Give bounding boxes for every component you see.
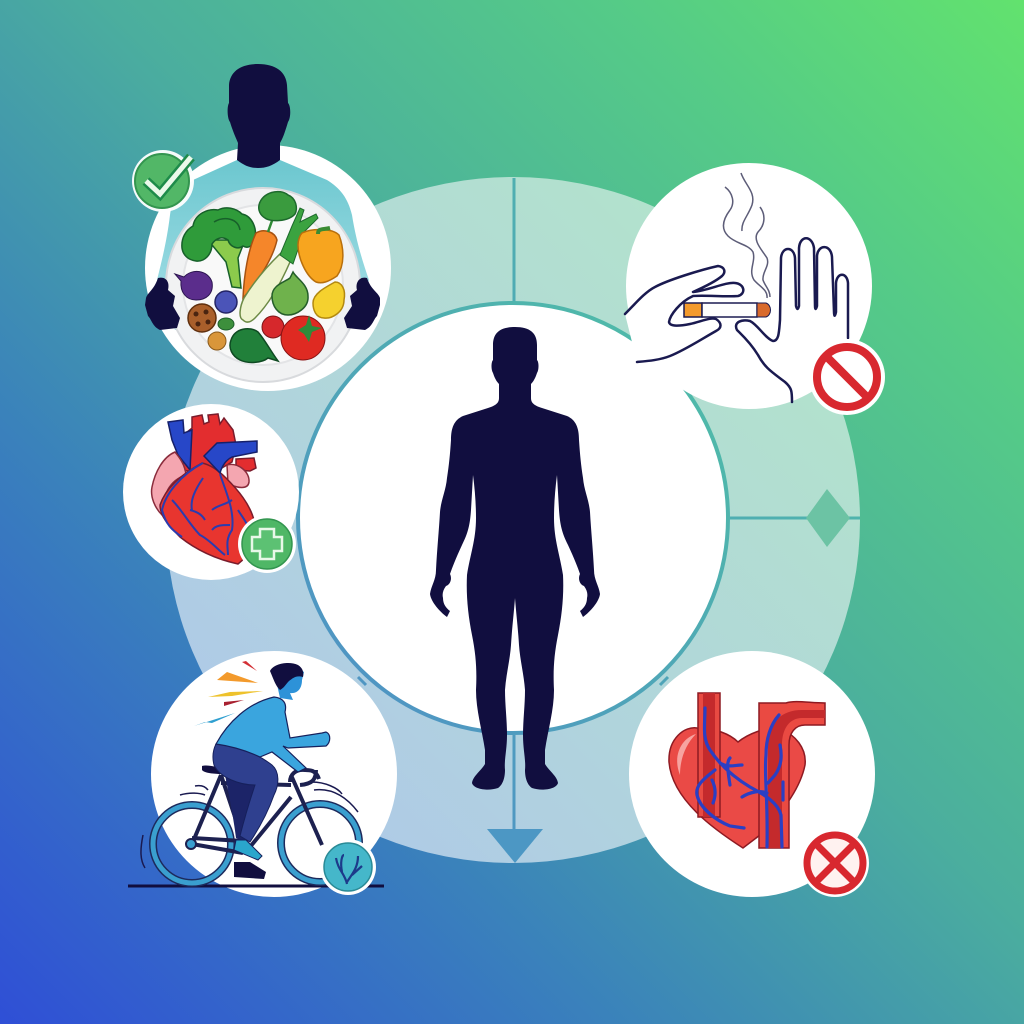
heart xyxy=(669,728,805,848)
plum xyxy=(215,291,237,313)
coronary vessels xyxy=(162,463,248,555)
hands xyxy=(145,278,180,330)
broccoli xyxy=(182,208,255,288)
spinach xyxy=(230,329,278,362)
panel: healthy heart xyxy=(123,404,299,580)
head xyxy=(270,663,304,700)
icon: cross badge xyxy=(801,829,869,897)
plate xyxy=(166,188,360,382)
wheels xyxy=(153,804,359,883)
cigarette xyxy=(684,303,770,317)
back shoe xyxy=(234,862,266,879)
person head silhouette xyxy=(228,64,290,168)
cookie xyxy=(188,304,216,332)
panel: healthy food xyxy=(145,64,391,391)
small leaf xyxy=(218,318,234,330)
ventricle xyxy=(160,463,255,564)
central body silhouette xyxy=(430,327,600,790)
smoke xyxy=(724,173,770,298)
aorta xyxy=(183,414,236,475)
ground xyxy=(128,884,384,888)
panel: damaged heart and arteries xyxy=(629,651,875,897)
superior vena cava xyxy=(168,420,192,470)
heart highlight xyxy=(677,734,696,775)
lemon xyxy=(313,282,345,318)
veins xyxy=(697,708,783,847)
eggplant xyxy=(175,271,212,300)
handlebar xyxy=(290,770,319,785)
left artery xyxy=(698,693,720,817)
leek xyxy=(240,208,318,322)
pepper xyxy=(298,228,343,283)
icon: leaf badge xyxy=(320,839,376,895)
carrot xyxy=(243,192,296,298)
back leg xyxy=(224,770,270,842)
small orange xyxy=(208,332,226,350)
pulmonary artery xyxy=(204,441,257,473)
outer ring panel xyxy=(166,177,860,863)
icon: green check badge xyxy=(132,150,194,212)
speed lines xyxy=(194,661,263,726)
right vessel xyxy=(236,458,256,471)
front leg xyxy=(213,744,278,842)
tomato xyxy=(281,315,325,360)
food circle xyxy=(145,145,391,391)
atria xyxy=(152,452,186,515)
torso xyxy=(216,697,330,772)
motion lines xyxy=(141,782,358,868)
centre circle xyxy=(298,303,728,733)
saddle xyxy=(202,765,224,774)
right artery xyxy=(759,702,825,848)
artichoke xyxy=(272,272,308,315)
frame xyxy=(192,775,322,853)
icon: prohibition badge xyxy=(809,339,885,415)
open hand xyxy=(736,238,848,402)
panel: no smoking xyxy=(625,163,872,409)
front shoe xyxy=(234,840,262,860)
shirt xyxy=(157,160,369,330)
icon: plus badge xyxy=(238,515,296,573)
smoking hand xyxy=(625,266,743,362)
panel: cycling xyxy=(128,651,397,897)
radish xyxy=(262,316,284,338)
